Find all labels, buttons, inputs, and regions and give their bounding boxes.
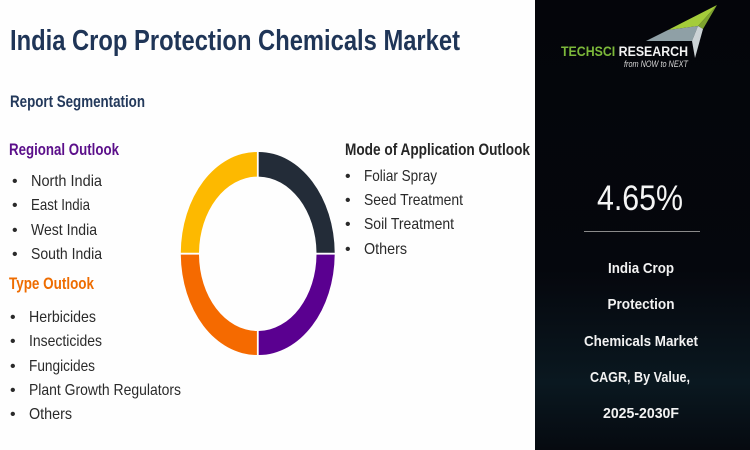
list: types: Fungicides — [29, 358, 95, 375]
sidebar panel — [535, 0, 750, 450]
panel: regional outlook — [9, 140, 119, 263]
list: types: • — [10, 406, 16, 423]
list: regions: North India — [31, 173, 102, 190]
list: types: Others — [29, 406, 72, 423]
donut ring — [181, 152, 335, 355]
list: regions: West India — [31, 222, 97, 239]
list: modes: • — [345, 168, 351, 185]
segment: navy — [259, 152, 335, 253]
list: regions: South India — [31, 246, 102, 263]
segment: yellow — [181, 152, 257, 253]
panel: mode of application outlook — [345, 140, 530, 258]
icon: logo arrow — [646, 5, 717, 58]
list: types: • — [10, 382, 16, 399]
logo — [561, 5, 717, 70]
list: regions: • — [12, 197, 18, 214]
list: modes: • — [345, 241, 351, 258]
stat description: 2025-2030F — [603, 405, 679, 422]
list: modes: Foliar Spray — [364, 168, 437, 185]
stat description: CAGR, By Value, — [590, 369, 690, 386]
stat: CAGR value: 4.65% — [597, 179, 683, 218]
list: types: • — [10, 333, 16, 350]
heading: type outlook: Type Outlook — [9, 274, 94, 293]
heading: regional outlook: Regional Outlook — [9, 140, 119, 159]
list: modes: • — [345, 216, 351, 233]
list: regions: • — [12, 222, 18, 239]
list: modes: • — [345, 192, 351, 209]
list: regions: East India — [31, 197, 90, 214]
stat description: India Crop — [608, 260, 674, 277]
list: regions: • — [12, 173, 18, 190]
list: modes: Others — [364, 241, 407, 258]
list: modes: Seed Treatment — [364, 192, 463, 209]
list: types: • — [10, 309, 16, 326]
list: regions: • — [12, 246, 18, 263]
list: types: • — [10, 358, 16, 375]
list: types: Insecticides — [29, 333, 102, 350]
list: regions — [12, 173, 102, 263]
stat description: Chemicals Market — [584, 333, 698, 350]
divider — [584, 231, 700, 232]
list: modes — [345, 168, 463, 258]
logo tagline: from NOW to NEXT — [624, 59, 689, 70]
segment: orange — [181, 255, 257, 355]
stat description: Protection — [608, 296, 674, 313]
stat description — [584, 260, 698, 422]
panel: type outlook — [9, 274, 181, 423]
segment: purple — [259, 255, 335, 355]
logo text: TECHSCI RESEARCH — [561, 44, 688, 59]
heading: mode of application: Mode of Application Outlook — [345, 140, 530, 159]
list: types — [10, 309, 181, 423]
list: types: Plant Growth Regulators — [29, 382, 181, 399]
subheading: report segmentation: Report Segmentation — [10, 93, 145, 111]
list: modes: Soil Treatment — [364, 216, 454, 233]
list: types: Herbicides — [29, 309, 96, 326]
title: India Crop Protection Chemicals Market — [10, 25, 460, 57]
